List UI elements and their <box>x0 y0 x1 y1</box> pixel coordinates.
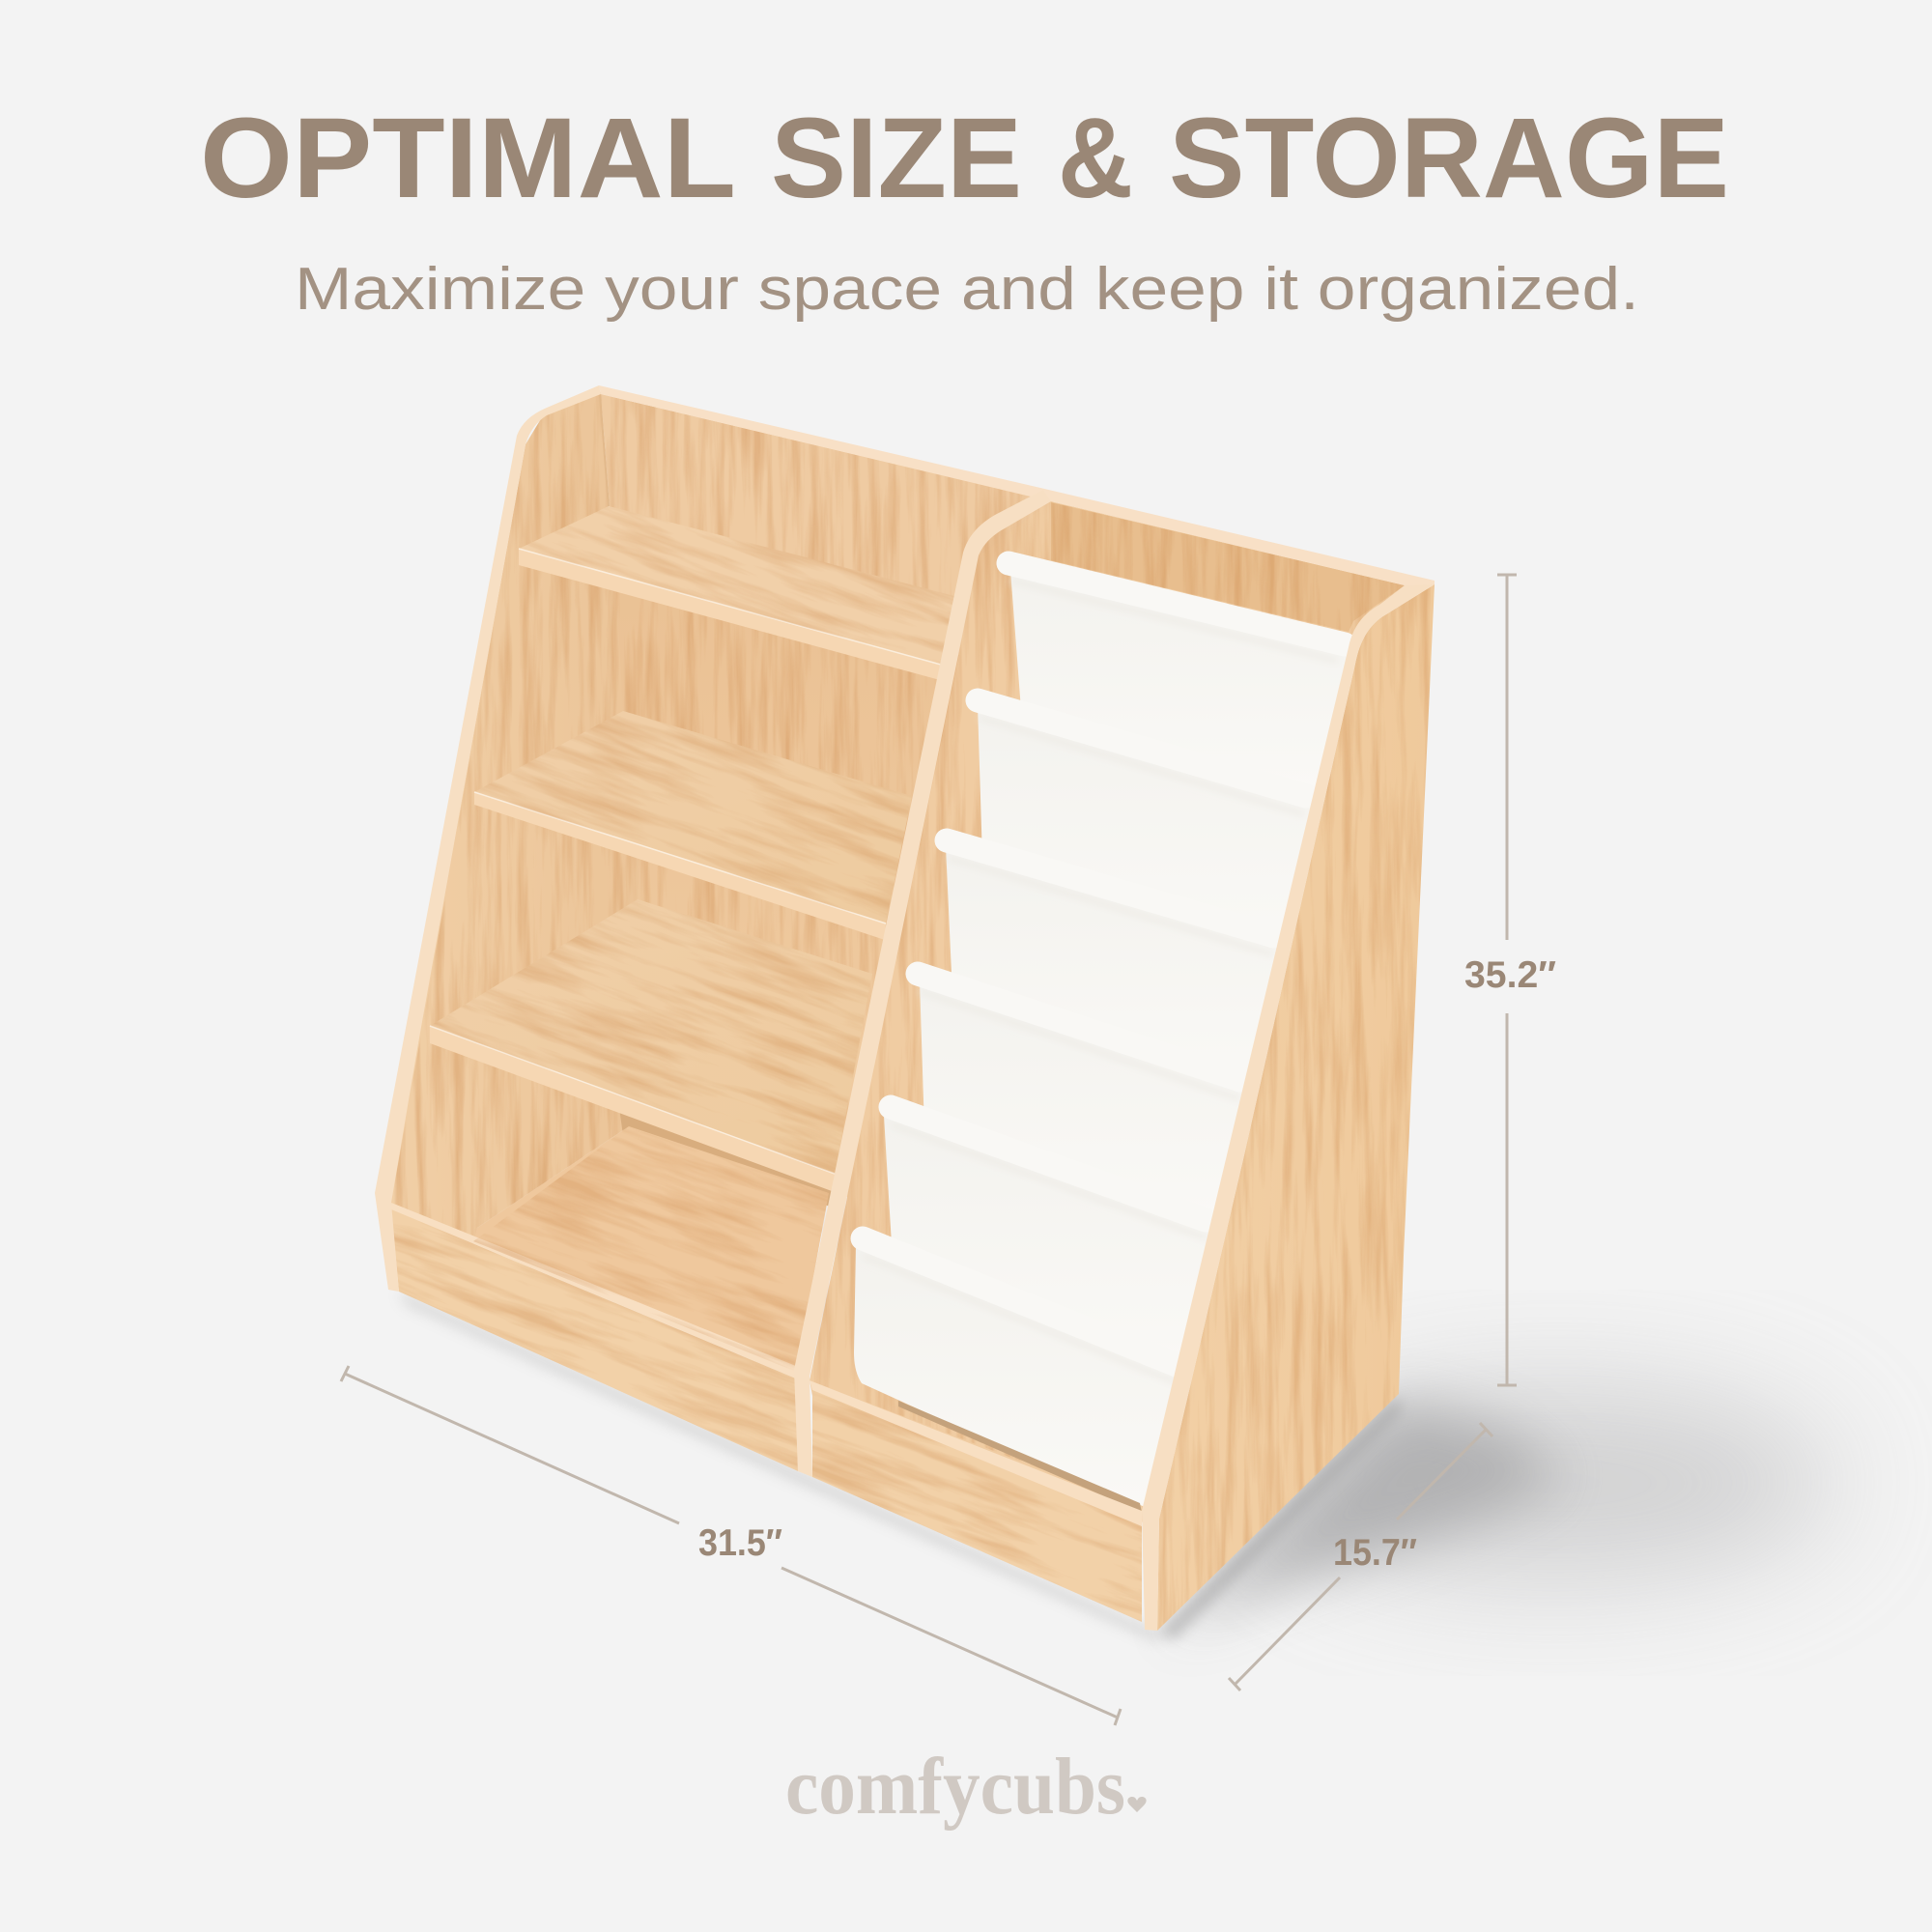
depth dimension line <box>1229 1423 1492 1690</box>
left bin front panel <box>391 1203 798 1471</box>
width dimension line <box>341 1366 1121 1725</box>
title: STORAGE <box>1169 95 1729 222</box>
pocket 1 <box>1009 563 1352 792</box>
left side inner face <box>389 392 639 1246</box>
shelf 1 <box>519 506 954 680</box>
subtitle: Maximize your space and keep it organized. <box>295 255 1639 323</box>
height label: 35.2″ <box>1464 954 1556 996</box>
top edge band of back panels <box>599 385 1435 585</box>
right compartment back wall <box>1051 502 1405 632</box>
right bin grain <box>812 1393 1142 1614</box>
title: & <box>1058 95 1133 222</box>
vertical wood grain <box>395 394 1405 1468</box>
pocket 3 <box>946 840 1283 1092</box>
shelf 2 <box>474 711 912 940</box>
right side grain <box>1158 587 1431 1629</box>
wall junction line <box>600 394 609 506</box>
right compartment inner wall <box>810 501 1405 1531</box>
canvas pockets <box>854 563 1352 1509</box>
height dimension line <box>1497 575 1517 1385</box>
horizontal wood grain <box>394 510 954 1468</box>
pocket 4 <box>918 974 1248 1222</box>
right side panel edge band <box>1142 584 1435 1631</box>
brand logo: comfycubs <box>785 1742 1125 1832</box>
left side panel edge band <box>375 385 601 1292</box>
back wall: upper section <box>601 394 1053 734</box>
cast shadow on floor <box>399 1292 1835 1642</box>
icon: heart <box>1127 1797 1147 1812</box>
pocket 5 <box>884 1107 1213 1367</box>
bottom compartment floor <box>473 1126 829 1372</box>
bookshelf cabinet <box>375 385 1435 1631</box>
shelf 3 <box>430 899 872 1191</box>
back wall: middle sections <box>609 560 966 1198</box>
gap behind right bin <box>898 1401 1142 1513</box>
shadow gap under shelf 3 <box>618 1101 850 1208</box>
pocket 2 <box>978 700 1314 956</box>
centre divider edge band <box>794 490 1051 1477</box>
right bin front panel <box>810 1380 1142 1622</box>
title: SIZE <box>771 95 1022 222</box>
right outer side face <box>1157 584 1435 1631</box>
title <box>200 95 1729 222</box>
title: OPTIMAL <box>200 95 736 222</box>
depth label: 15.7″ <box>1333 1532 1417 1574</box>
pocket 6 <box>854 1238 1184 1509</box>
width label: 31.5″ <box>698 1522 782 1564</box>
